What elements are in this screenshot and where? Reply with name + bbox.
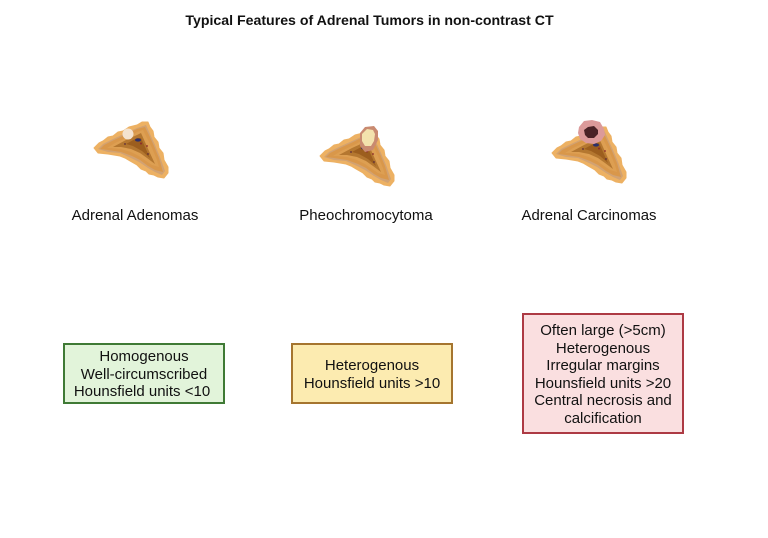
box: adenoma features: Homogenous [99, 348, 189, 365]
gland: carcinoma [552, 120, 626, 183]
label: pheochromocytoma: Pheochromocytoma [299, 207, 433, 224]
gland: pheochromocytoma [320, 126, 394, 186]
box: carcinoma features [522, 313, 684, 434]
title: Typical Features of Adrenal Tumors in non-contrast CT [185, 12, 554, 28]
box: adenoma features: Hounsfield units <10 [74, 383, 210, 400]
box: carcinoma features: Irregular margins [546, 357, 660, 374]
box: carcinoma features: Often large (>5cm) [540, 322, 666, 339]
box: pheochromocytoma features [291, 343, 453, 404]
box: pheochromocytoma features: Heterogenous [325, 357, 419, 374]
label: adenomas: Adrenal Adenomas [72, 207, 198, 224]
box: carcinoma features: Central necrosis and [534, 392, 672, 409]
box: pheochromocytoma features: Hounsfield units >10 [304, 374, 440, 392]
gland: adenoma [94, 122, 168, 178]
box: adenoma features [63, 343, 225, 404]
label: carcinomas: Adrenal Carcinomas [522, 208, 656, 224]
box: carcinoma features: Heterogenous [556, 340, 650, 356]
box: carcinoma features: calcification [564, 410, 642, 426]
box: carcinoma features: Hounsfield units >20 [535, 374, 671, 392]
box: adenoma features: Well-circumscribed [81, 366, 207, 383]
